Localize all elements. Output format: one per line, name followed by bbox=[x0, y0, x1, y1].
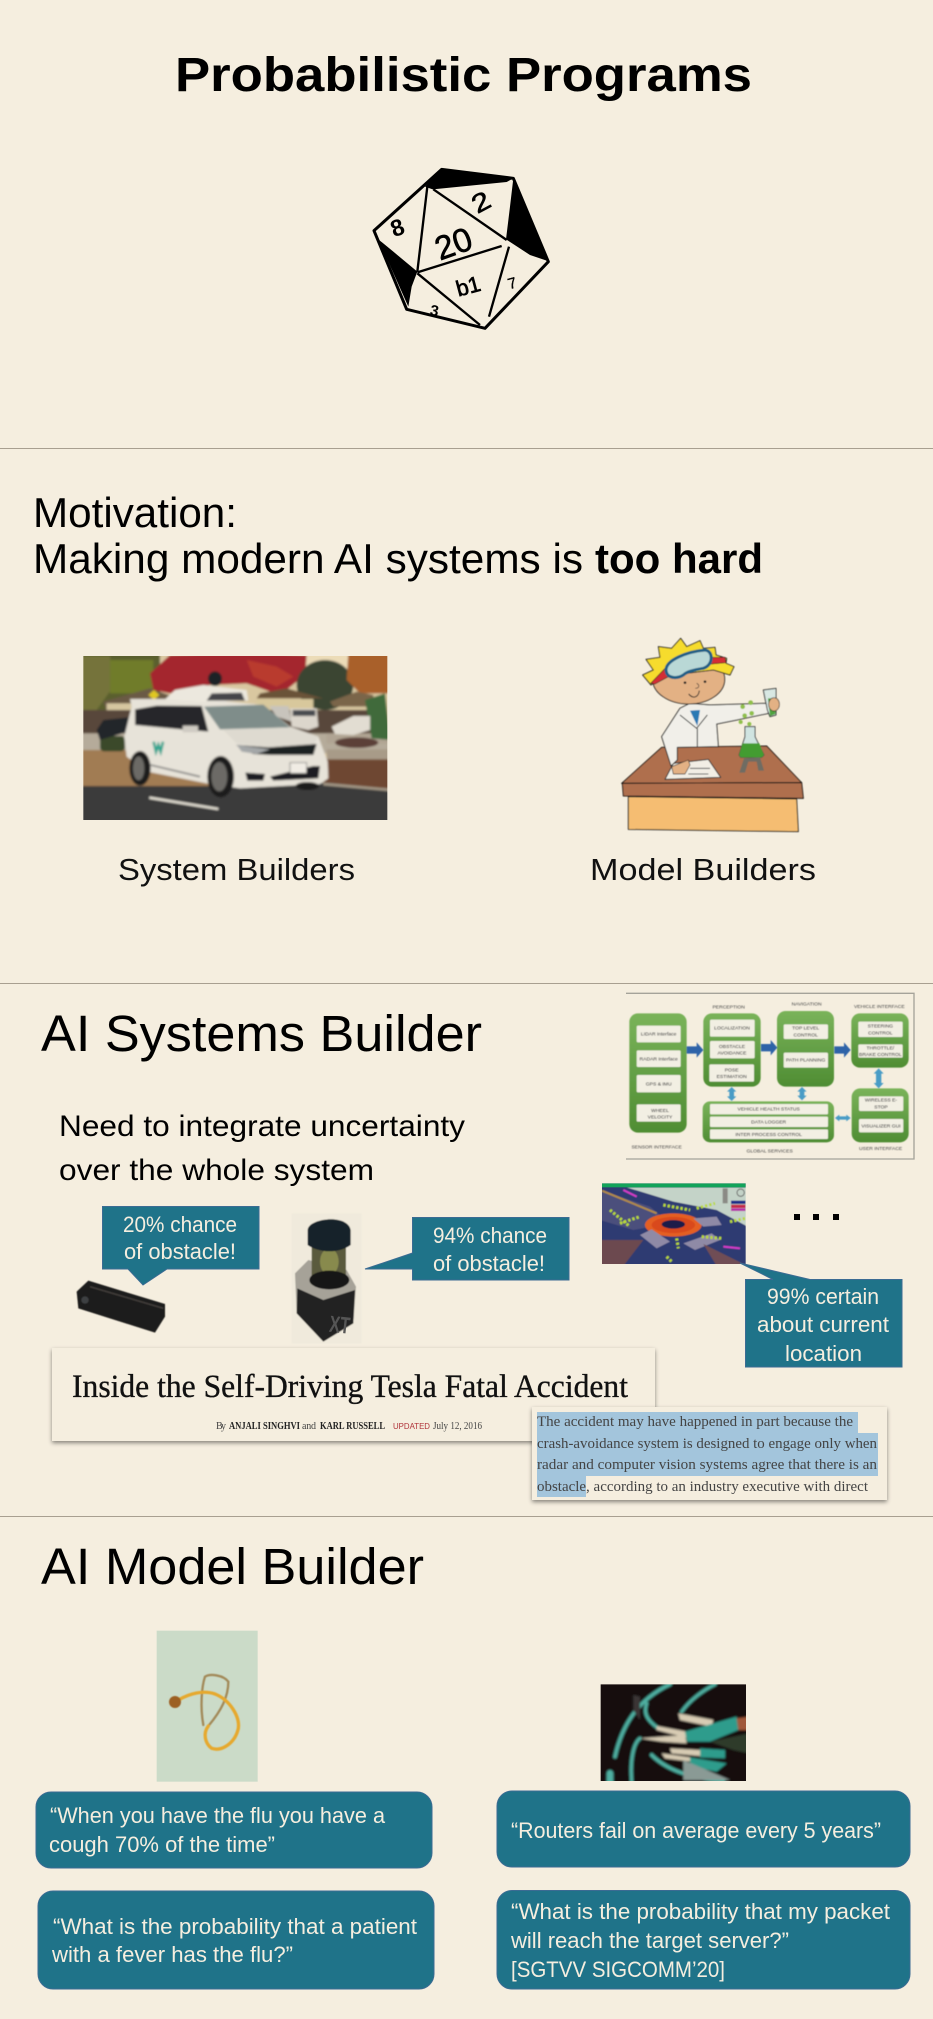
callout: 20% chance: of obstacle! bbox=[124, 1239, 236, 1264]
diagram: self-driving system architecture: THROTTLE/ bbox=[866, 1045, 895, 1051]
icon: twenty-sided die: b1 bbox=[453, 271, 483, 301]
quote: routers fail bbox=[497, 1791, 910, 1867]
callout: 94% chance bbox=[365, 1218, 569, 1280]
diagram: self-driving system architecture: STEERING bbox=[868, 1023, 893, 1029]
heading: motivation: Making modern AI systems is bbox=[33, 535, 583, 582]
diagram: self-driving system architecture: GLOBAL SERVICES bbox=[747, 1149, 793, 1155]
quote: flu cough: cough 70% of the time” bbox=[49, 1832, 275, 1857]
article excerpt with highlight: obstacle, according to an industry executive with direct bbox=[537, 1479, 868, 1495]
article excerpt with highlight bbox=[532, 1407, 887, 1500]
heading: motivation: Motivation: bbox=[33, 489, 237, 536]
quote: flu cough bbox=[36, 1792, 432, 1868]
icon: depth camera sensor bbox=[77, 1281, 165, 1333]
callout: 94% chance: 94% chance bbox=[433, 1223, 547, 1248]
quote: fever and flu bbox=[38, 1891, 434, 1989]
diagram: self-driving system architecture: AVOIDANCE bbox=[717, 1051, 747, 1057]
diagram: self-driving system architecture: GPS & IMU bbox=[646, 1081, 672, 1087]
diagram: self-driving system architecture: DATA LOGGER bbox=[751, 1119, 787, 1125]
icon: twenty-sided die: 7 bbox=[506, 275, 519, 293]
news headline card: KARL RUSSELL bbox=[320, 1421, 385, 1432]
quote: packet reach: will reach the target server?” bbox=[510, 1928, 789, 1953]
diagram: self-driving system architecture: CONTROL bbox=[793, 1032, 818, 1038]
callout: 94% chance: of obstacle! bbox=[433, 1251, 545, 1276]
quote: fever and flu: “What is the probability that a patient bbox=[53, 1914, 418, 1939]
icon: twenty-sided die: 8 bbox=[387, 213, 408, 242]
diagram: self-driving system architecture: VISUALIZER GUI bbox=[861, 1123, 901, 1129]
quote: flu cough: “When you have the flu you have a bbox=[50, 1803, 385, 1828]
quote: packet reach: “What is the probability that my packet bbox=[511, 1899, 891, 1924]
callout: 20% chance bbox=[102, 1206, 259, 1285]
icon: lidar sensor bbox=[292, 1213, 362, 1343]
diagram: self-driving system architecture: VEHICLE HEALTH STATUS bbox=[738, 1107, 800, 1113]
photo: self-driving car bbox=[80, 653, 391, 823]
label: system builders: System Builders bbox=[118, 852, 355, 887]
diagram: self-driving system architecture: RADAR Interface bbox=[640, 1056, 678, 1062]
diagram: self-driving system architecture: USER INTERFACE bbox=[859, 1146, 903, 1152]
photo: fibre-optic cables bbox=[600, 1684, 746, 1781]
diagram: self-driving system architecture: PATH PLANNING bbox=[786, 1057, 825, 1063]
diagram: self-driving system architecture: NAVIGATION bbox=[792, 1002, 822, 1008]
quote: packet reach: [SGTVV SIGCOMM’20] bbox=[511, 1957, 725, 1982]
heading: AI systems builder: AI Systems Builder bbox=[41, 1005, 482, 1062]
news headline card: and bbox=[302, 1421, 316, 1432]
news headline card: UPDATED bbox=[393, 1421, 430, 1431]
article excerpt with highlight: radar and computer vision systems agree that there is an bbox=[537, 1457, 878, 1473]
text: integrate uncertainty: Need to integrate uncertainty bbox=[59, 1110, 465, 1143]
diagram: self-driving system architecture: OBSTACLE bbox=[719, 1044, 746, 1050]
icon: twenty-sided die: 3 bbox=[429, 302, 440, 320]
news headline card: By bbox=[216, 1421, 226, 1432]
diagram: self-driving system architecture: POSE bbox=[725, 1067, 739, 1073]
illustration: scientist at desk bbox=[622, 638, 803, 832]
diagram: self-driving system architecture: BRAKE CONTROL bbox=[859, 1052, 902, 1058]
quote: routers fail: “Routers fail on average every 5 years” bbox=[511, 1818, 881, 1843]
diagram: self-driving system architecture: WHEEL bbox=[651, 1108, 669, 1114]
diagram: self-driving system architecture: PERCEPTION bbox=[712, 1004, 745, 1010]
callout: 99% certain: about current bbox=[757, 1312, 890, 1337]
text: integrate uncertainty bbox=[59, 1110, 465, 1187]
diagram: self-driving system architecture: STOP bbox=[874, 1105, 888, 1111]
diagram: self-driving system architecture: TOP LEVEL bbox=[792, 1026, 819, 1032]
label: model builders: Model Builders bbox=[590, 852, 816, 887]
diagram: self-driving system architecture: VEHICLE INTERFACE bbox=[854, 1004, 905, 1010]
diagram: self-driving system architecture: ESTIMATION bbox=[717, 1074, 747, 1080]
text: integrate uncertainty: over the whole system bbox=[59, 1154, 374, 1187]
article excerpt with highlight: crash-avoidance system is designed to engage only when bbox=[537, 1436, 878, 1452]
icon: lidar sensor: XT bbox=[328, 1311, 351, 1339]
diagram: self-driving system architecture: CONTROL bbox=[868, 1030, 893, 1036]
callout: 99% certain bbox=[740, 1263, 902, 1367]
diagram: self-driving system architecture: LOCALIZATION bbox=[714, 1026, 750, 1032]
news headline card: ANJALI SINGHVI bbox=[229, 1421, 300, 1432]
icon: twenty-sided die: 2 bbox=[467, 186, 496, 220]
image: lidar point-cloud map bbox=[600, 1181, 748, 1266]
callout: 99% certain: location bbox=[785, 1341, 862, 1366]
diagram: self-driving system architecture: VELOCITY bbox=[648, 1114, 673, 1120]
callout: 99% certain: 99% certain bbox=[767, 1284, 879, 1309]
diagram: self-driving system architecture: SENSOR INTERFACE bbox=[631, 1144, 683, 1150]
icon: twenty-sided die bbox=[374, 169, 548, 328]
article excerpt with highlight: The accident may have happened in part because the bbox=[537, 1414, 853, 1430]
heading: motivation: too hard bbox=[595, 535, 763, 582]
news headline card: July 12, 2016 bbox=[433, 1421, 482, 1432]
title: Probabilistic Programs bbox=[175, 49, 752, 102]
heading: motivation bbox=[33, 489, 763, 582]
diagram: self-driving system architecture bbox=[626, 993, 914, 1159]
icon: twenty-sided die: 20 bbox=[430, 221, 478, 268]
news headline card bbox=[52, 1348, 655, 1441]
photo: stethoscope bbox=[157, 1631, 258, 1782]
quote: fever and flu: with a fever has the flu?” bbox=[51, 1942, 293, 1967]
diagram: self-driving system architecture: INTER PROCESS CONTROL bbox=[735, 1132, 802, 1138]
quote: packet reach bbox=[497, 1890, 910, 1989]
callout: 20% chance: 20% chance bbox=[123, 1212, 237, 1237]
diagram: self-driving system architecture: WIRELESS E- bbox=[865, 1098, 897, 1104]
news headline card: Inside the Self-Driving Tesla Fatal Accident bbox=[72, 1369, 628, 1405]
heading: AI model builder: AI Model Builder bbox=[41, 1538, 424, 1595]
ellipsis marks bbox=[794, 1214, 839, 1220]
diagram: self-driving system architecture: LIDAR Interface bbox=[641, 1032, 677, 1038]
